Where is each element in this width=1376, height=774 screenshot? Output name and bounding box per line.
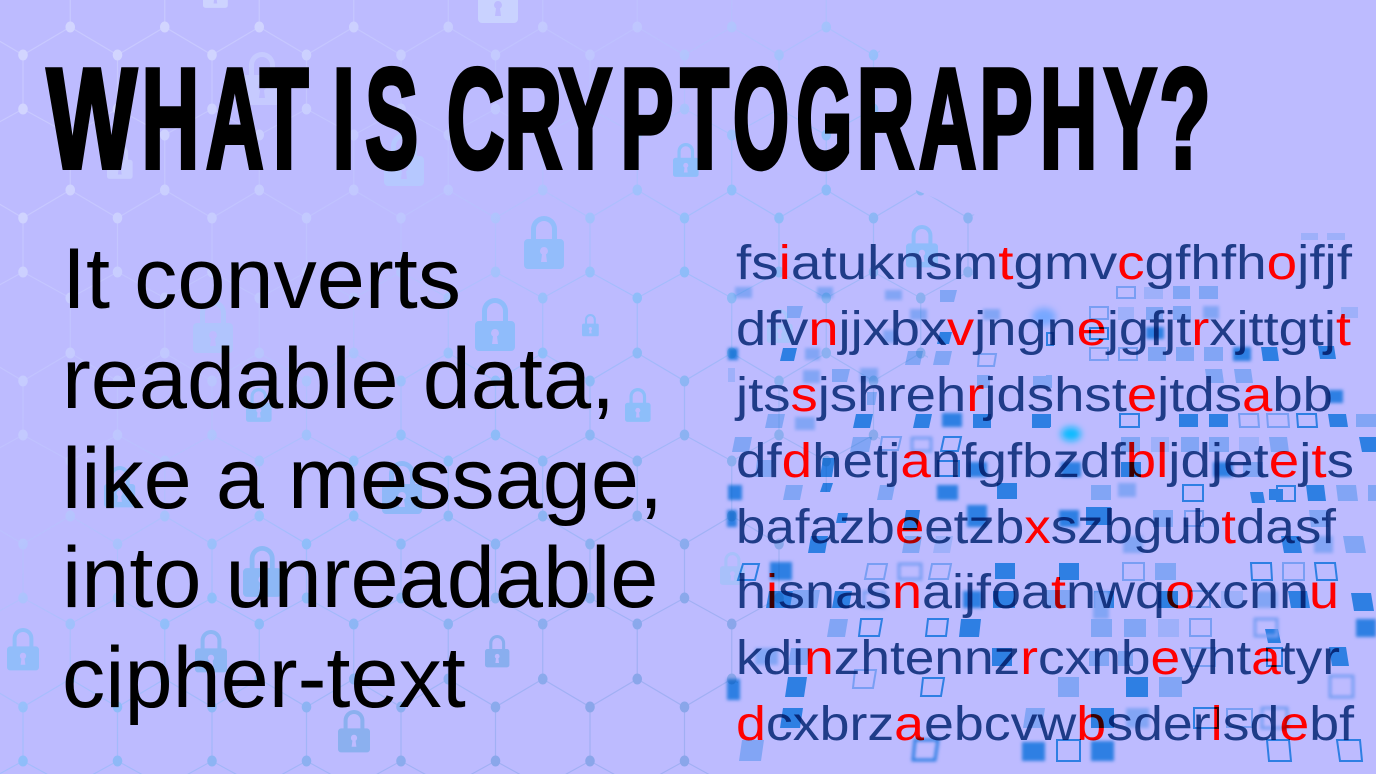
- cipher text block with hidden red message: jtssjshreh rjdshst ejtdsabb: [734, 369, 1333, 422]
- cipher text block with hidden red message: dfvnjjxbx vjngnejgfjtrxjttgtj t: [736, 303, 1351, 356]
- body text: definition: [62, 231, 663, 726]
- body text: definition: readable data,: [62, 331, 615, 427]
- body text: definition: It converts: [62, 231, 461, 327]
- title: RAPHY: [857, 40, 1157, 198]
- body text: definition: like a message,: [62, 431, 663, 527]
- background: hexagon network: [0, 0, 974, 774]
- cipher text block with hidden red message: [734, 237, 1355, 751]
- cipher text block with hidden red message: dcxbrz aebcvw bsderlsdebf: [736, 698, 1355, 751]
- background: pixel squares field: [727, 233, 1376, 761]
- title: HAT IS CRYPT: [142, 40, 729, 198]
- cipher text block with hidden red message: kdinzhtennz rcxnbeyhtatyr: [736, 632, 1340, 685]
- cipher text block with hidden red message: bafazb eetzbxszbgub tdasf: [736, 501, 1337, 554]
- icons: background padlocks: [7, 0, 938, 752]
- title: ?: [1159, 40, 1211, 198]
- cipher text block with hidden red message: fsiatuknsm tgmv cgfhfh ojfjf: [736, 237, 1353, 290]
- title: W: [47, 40, 137, 198]
- title: G: [796, 40, 852, 198]
- cipher text block with hidden red message: dfdhetjanfgfbzdf bljdjet ejts: [736, 435, 1354, 488]
- title: O: [733, 40, 789, 198]
- body text: definition: cipher-text: [62, 630, 466, 726]
- body text: definition: into unreadable: [62, 530, 658, 626]
- cipher text block with hidden red message: hisnas naijfoa tnwqoxcnn u: [736, 566, 1339, 619]
